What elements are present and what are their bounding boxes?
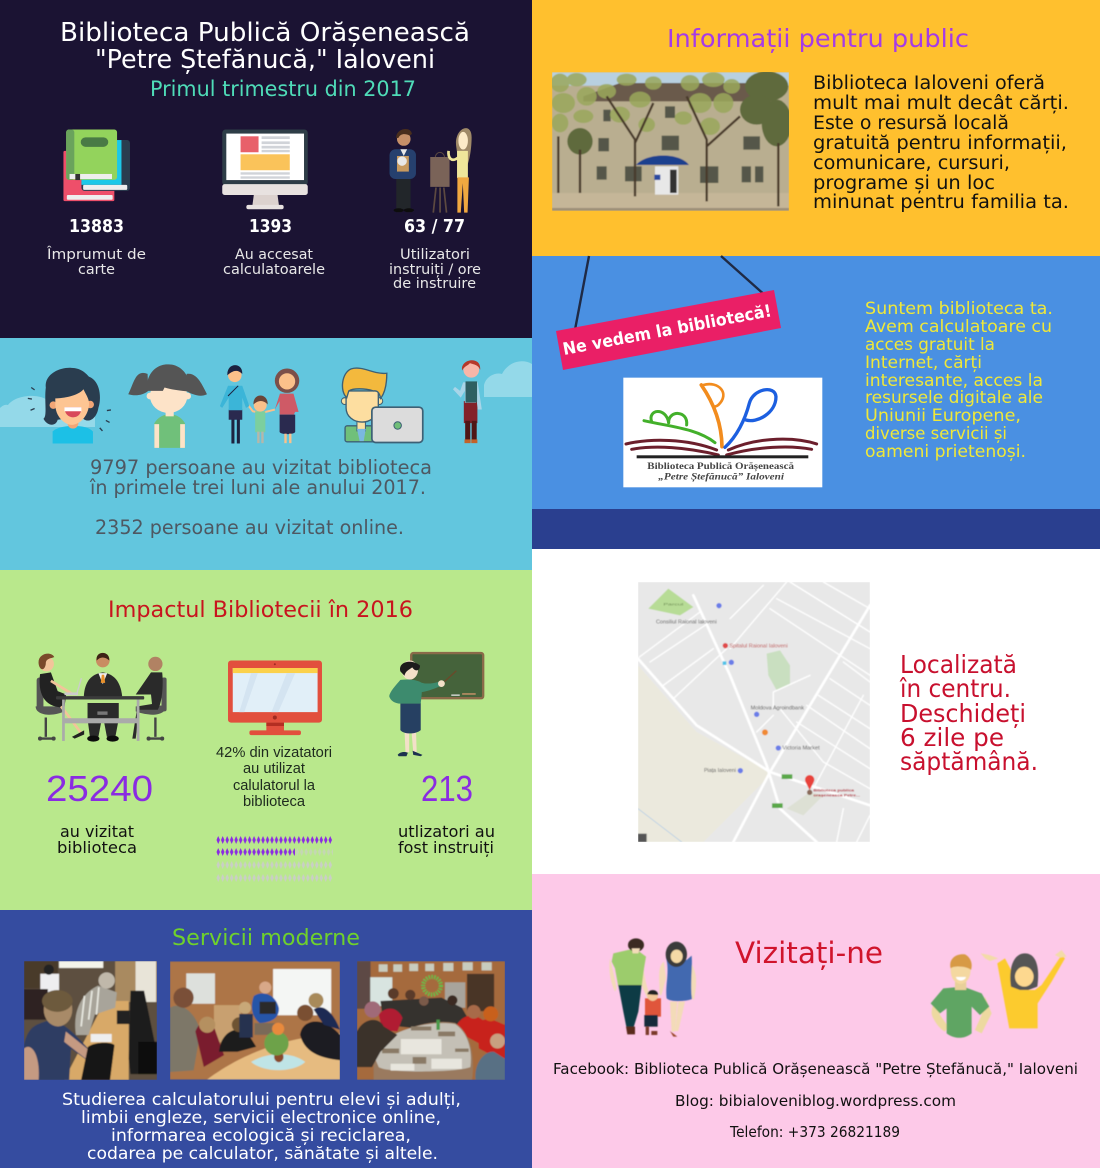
icon: cloud left [0, 391, 95, 427]
visitors text: 9797 persoane au vizitat biblioteca [90, 456, 432, 479]
map: Consiliul Raional Ialoveni [656, 620, 717, 626]
visitors text: 2352 persoane au vizitat online. [95, 516, 404, 539]
paragraph: what the library offers: Suntem biblioteca ta. [865, 299, 1053, 318]
stat: trained users: instruiți / ore [389, 262, 481, 278]
contact: blog: Blog: bibialoveniblog.wordpress.com [675, 1092, 956, 1110]
stat: 213 trained users: fost instruiți [398, 838, 494, 857]
icon: instructor and painter [390, 128, 472, 213]
panel: see you at the library [532, 256, 1100, 549]
map: Biblioteca publica [813, 787, 855, 792]
photo: computer class [24, 961, 157, 1080]
paragraph: about the library: Este o resursă locală [813, 113, 1009, 134]
panel: visitors [0, 338, 532, 570]
stat: books borrowed: 13883 [69, 216, 124, 237]
stat: computer access: Au accesat [235, 247, 313, 263]
heading: Servicii moderne [172, 926, 360, 951]
icon: meeting table [36, 653, 167, 742]
icon: man with laptop [341, 368, 423, 442]
stat: computer access [223, 216, 325, 278]
map: Victoria Market [782, 745, 820, 751]
paragraph: what the library offers: diverse servicii și [865, 424, 1007, 443]
panel: modern services [0, 910, 532, 1168]
logo: caption: Biblioteca Publică Orășenească [647, 461, 795, 471]
stat: 213 trained users [398, 768, 495, 857]
paragraph: about the library [813, 73, 1069, 213]
stat: trained users: Utilizatori [400, 247, 470, 263]
paragraph: about the library: minunat pentru familia ta. [813, 192, 1069, 213]
paragraph: what the library offers: Uniunii Europene, [865, 406, 1021, 425]
pictogram: 42 percent [216, 836, 333, 882]
heading: Impactul Bibliotecii în 2016 [108, 597, 413, 623]
services description: Studierea calculatorului pentru elevi și adulți, [62, 1090, 461, 1110]
subtitle: Primul trimestru din 2017 [150, 77, 416, 101]
stat: 25240 visits: au vizitat [60, 822, 134, 841]
icon: family walking [609, 938, 696, 1037]
photo: library building exterior [552, 72, 789, 211]
heading: Vizitați-ne [735, 936, 883, 970]
title: Biblioteca Publică Orășenească [60, 18, 470, 48]
paragraph: what the library offers: Internet, cărți [865, 353, 982, 372]
logo: letter B [644, 412, 715, 443]
stat: computer access: 1393 [249, 216, 292, 237]
panel: location [532, 549, 1100, 874]
location text: în centru. [899, 674, 1011, 703]
map: Piața Ialoveni [704, 768, 736, 774]
paragraph: about the library: mult mai mult decât cărți. [813, 93, 1069, 114]
logo: letter P [701, 384, 723, 447]
icon: laughing woman [28, 368, 111, 443]
stat: 25240 visits [46, 768, 153, 857]
paragraph: about the library: programe și un loc [813, 173, 995, 194]
icon: stack of books [63, 130, 130, 201]
stat: 213 trained users: utlizatori au [398, 822, 495, 841]
icon: smiling couple [931, 950, 1067, 1038]
location text: săptămână. [900, 747, 1038, 776]
map: orașeneasca Petre... [813, 793, 860, 798]
location text: 6 zile pe [900, 723, 1004, 752]
paragraph: what the library offers: oameni prietenoși. [865, 442, 1026, 461]
photo: presentation group [170, 961, 340, 1080]
services description: informarea ecologică și reciclarea, [111, 1126, 411, 1146]
paragraph: what the library offers: Avem calculatoare cu [865, 317, 1052, 336]
services description [62, 1090, 461, 1164]
icon: family holding hands [220, 365, 299, 443]
location text [899, 650, 1038, 776]
stat: 213 trained users: 213 [421, 768, 473, 809]
panel: statistics header [0, 0, 532, 338]
visitors text: în primele trei luni ale anului 2017. [89, 476, 426, 499]
panel: public information [532, 0, 1100, 256]
callout: 42% of visitors used the computer: calulatorul la [233, 778, 316, 794]
panel: visit us [532, 874, 1100, 1168]
callout: 42% of visitors used the computer: au utilizat [243, 761, 305, 777]
contact: Facebook: Facebook: Biblioteca Publică Orășenească "Petre Ștefănucă," Ialoveni [553, 1060, 1078, 1078]
contact: phone: Telefon: +373 26821189 [729, 1123, 900, 1141]
stat: 25240 visits: biblioteca [57, 838, 137, 857]
location text: Localizată [900, 650, 1017, 679]
stat: books borrowed [46, 216, 146, 278]
icon: red monitor [228, 661, 322, 735]
title: "Petre Ștefănucă," Ialoveni [95, 45, 435, 75]
stat: books borrowed: Împrumut de [46, 245, 146, 263]
logo: caption [647, 461, 795, 481]
stat: 25240 visits: 25240 [46, 768, 153, 809]
logo: letter rho [725, 390, 776, 447]
panel: library impact 2016 [0, 570, 532, 910]
callout: 42% of visitors used the computer: 42% din vizatatori [216, 745, 332, 761]
icon: standing man [453, 360, 482, 443]
title [60, 18, 470, 75]
visitors text [89, 456, 432, 539]
callout: 42% of visitors used the computer: biblioteca [243, 794, 306, 810]
map: Spitalul Raional Ialoveni [729, 643, 788, 649]
icon: teacher at blackboard [389, 653, 483, 756]
logo: caption: „Petre Ștefănucă” Ialoveni [658, 471, 785, 481]
stat: trained users: de instruire [393, 276, 476, 292]
map: Moldova Agroindbank [751, 705, 805, 711]
hanging strings [574, 256, 767, 335]
logo: open book [626, 439, 817, 455]
stat: books borrowed: carte [78, 262, 115, 278]
services description: limbii engleze, servicii electronice online, [81, 1108, 441, 1128]
paragraph: about the library: comunicare, cursuri, [813, 153, 1010, 174]
map: Parcul [663, 601, 684, 606]
services description: codarea pe calculator, sănătate și altele. [87, 1144, 438, 1164]
paragraph: what the library offers: resursele digitale ale [865, 388, 1043, 407]
stat: computer access: calculatoarele [223, 262, 325, 278]
stat: trained users: 63 / 77 [404, 216, 465, 237]
banner: Ne vedem la bibliotecă! [561, 301, 773, 360]
icon: girl with pigtails [128, 364, 207, 448]
stat: trained users [389, 216, 481, 292]
paragraph: about the library: gratuită pentru informații, [813, 133, 1067, 154]
paragraph: about the library: Biblioteca Ialoveni oferă [813, 73, 1045, 94]
photo: recycling workshop [357, 961, 505, 1080]
location text: Deschideți [900, 699, 1026, 728]
paragraph: what the library offers [865, 299, 1053, 461]
paragraph: what the library offers: acces gratuit la [865, 335, 995, 354]
icon: cloud right [484, 361, 532, 397]
icon: computer monitor [222, 130, 308, 209]
paragraph: what the library offers: interesante, acces la [865, 371, 1043, 390]
callout: 42% of visitors used the computer [216, 745, 332, 810]
heading: Informații pentru public [667, 24, 969, 53]
logo [623, 378, 822, 487]
map [638, 582, 870, 842]
